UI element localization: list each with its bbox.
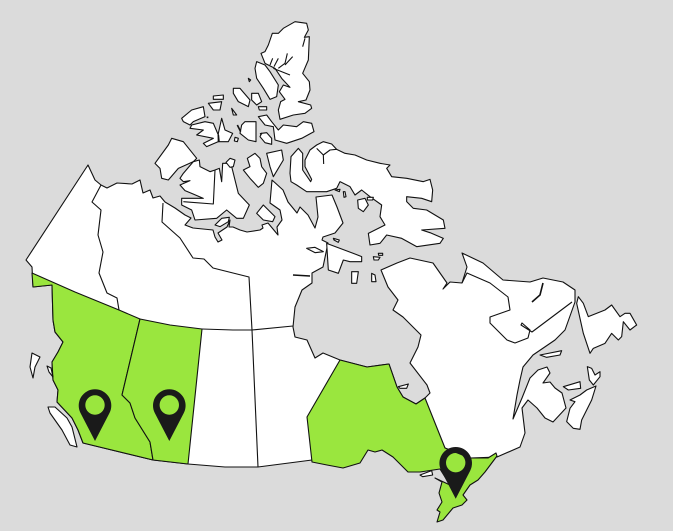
island: small islet — [234, 137, 238, 142]
island: Bylot — [317, 148, 337, 164]
islands: British Columbia coast — [30, 353, 77, 447]
provinces: British Columbia and Alberta — [32, 273, 202, 464]
province: British Columbia — [32, 273, 153, 460]
island: Jens Munk — [335, 189, 340, 192]
island: Haida Gwaii — [30, 353, 40, 378]
province: Alberta — [122, 319, 202, 464]
island: Prince of Wales — [243, 153, 267, 187]
island: Byam Martin — [218, 118, 233, 142]
island: Vancouver — [48, 407, 77, 447]
island: Anticosti — [540, 351, 562, 357]
island: Coats arm — [307, 247, 323, 253]
island: Nottingham — [378, 253, 383, 255]
island: King William — [257, 205, 275, 222]
island: coastal islet — [47, 366, 53, 377]
island: Prince Charles — [358, 198, 368, 212]
island: Manitoulin — [420, 471, 433, 477]
island: Mansel — [372, 273, 376, 282]
inlet: Chesterfield — [293, 275, 310, 276]
island: Air Force — [367, 197, 373, 200]
island: Lougheed — [232, 108, 237, 115]
pin: Ontario — [439, 447, 472, 499]
inlet: Lake Melville — [532, 283, 543, 302]
island: Salisbury — [373, 257, 380, 260]
island: Borden — [208, 102, 222, 110]
island: Foxe Basin islet — [343, 192, 346, 197]
island: Coats — [352, 272, 358, 283]
inlet: Coronation Gulf peninsula — [215, 217, 229, 227]
islands: Arctic archipelago west — [155, 138, 283, 227]
island: Graham — [258, 107, 267, 110]
marks: straits — [207, 117, 262, 142]
island: Amund Ringnes — [233, 88, 250, 107]
islands: Baffin region — [290, 142, 445, 260]
island: Melville — [190, 122, 218, 147]
island: Prince Patrick — [182, 107, 205, 125]
island: Victoria — [180, 160, 249, 220]
island: Mackenzie King — [213, 95, 223, 99]
territorial and provincial borders — [92, 185, 572, 467]
province: Ontario — [307, 360, 497, 522]
island: Banks — [155, 138, 197, 180]
pin: Alberta — [153, 389, 186, 441]
island: Baffin — [290, 142, 445, 247]
island: Meighen — [248, 78, 251, 82]
islands: Arctic archipelago north — [182, 22, 314, 147]
island: Somerset — [267, 150, 283, 177]
island: Rowley — [333, 238, 339, 242]
island: Stefansson — [226, 158, 235, 167]
island: Ellesmere — [261, 22, 312, 119]
island: Devon — [258, 115, 314, 143]
islands: Hudson Bay and Newfoundland — [307, 243, 637, 477]
island: Southampton — [327, 243, 362, 273]
fjords: Ellesmere — [270, 38, 305, 75]
island: Axel Heiberg — [255, 62, 278, 99]
island: Cornwallis — [260, 133, 272, 144]
island: Newfoundland — [577, 297, 637, 353]
island: Ellef Ringnes — [252, 93, 262, 105]
pin: British Columbia — [79, 389, 111, 441]
island: Cape Breton — [587, 367, 600, 385]
island: Prince Edward — [563, 382, 581, 390]
mainland Canada — [26, 165, 575, 467]
peninsula: Nova Scotia — [567, 386, 596, 429]
border: Victoria Island — [183, 170, 215, 204]
islands: Maritimes — [563, 367, 600, 429]
island: Bathurst — [240, 122, 256, 142]
island: Akimiski — [398, 384, 408, 388]
